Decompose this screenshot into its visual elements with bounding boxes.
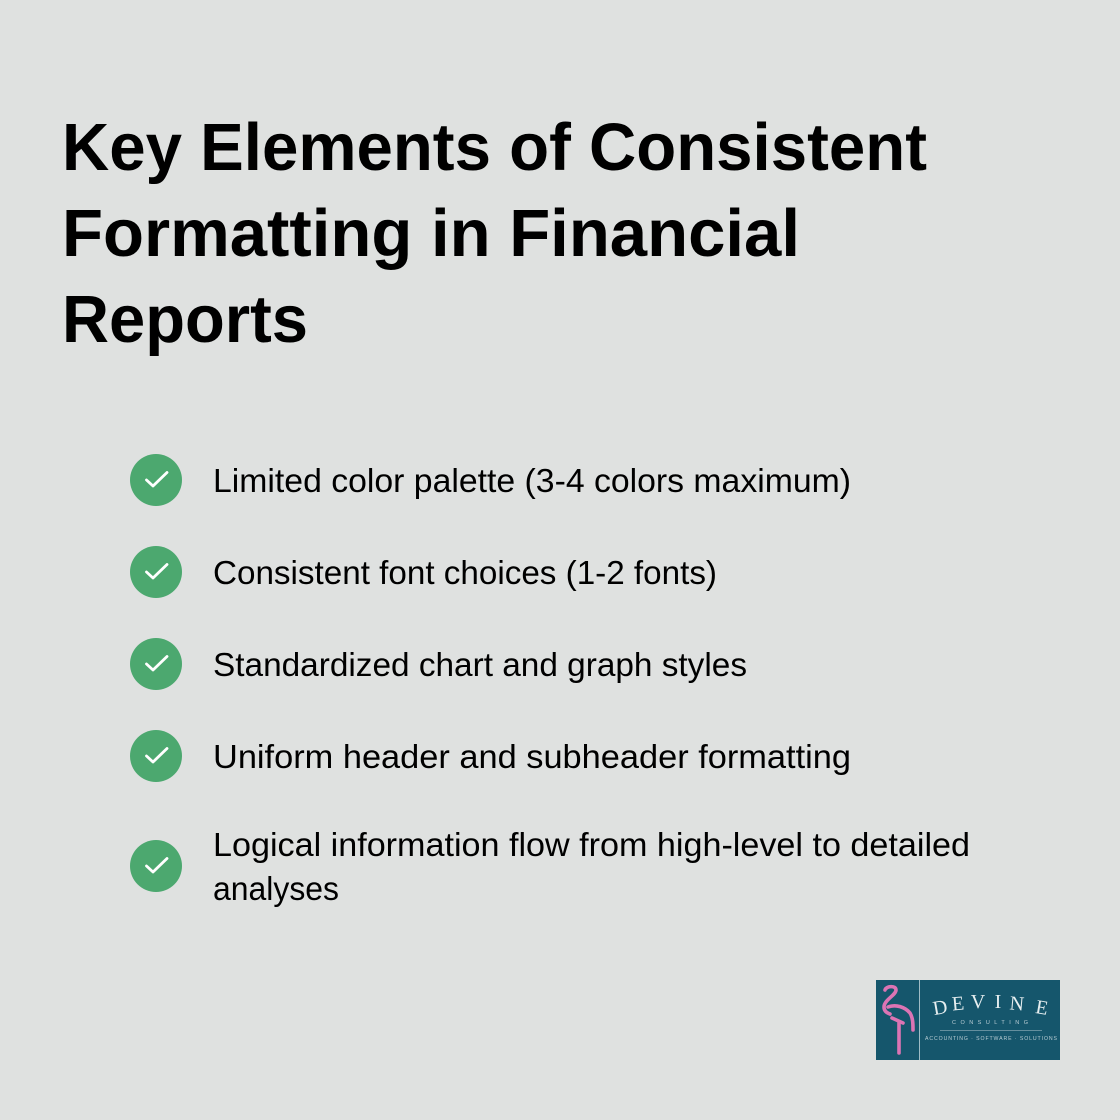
item: limited color palette: Limited color palette (3-4 colors maximum) bbox=[213, 463, 851, 500]
item: logical information flow bbox=[130, 827, 970, 908]
item: logical information flow: Logical information flow from high-level to detailed bbox=[213, 827, 970, 864]
item: limited color palette bbox=[130, 454, 851, 506]
title bbox=[62, 111, 927, 357]
icon: flamingo bbox=[884, 987, 913, 1053]
item: standardized charts: Standardized chart and graph styles bbox=[213, 647, 747, 684]
item: uniform headers bbox=[130, 730, 851, 782]
title: Formatting in Financial bbox=[62, 197, 800, 271]
item: standardized charts bbox=[130, 638, 747, 690]
item: consistent fonts bbox=[130, 546, 717, 598]
wordmark bbox=[925, 991, 1058, 1042]
checklist bbox=[130, 454, 970, 908]
wordmark: D bbox=[931, 996, 949, 1020]
wordmark: ACCOUNTING · SOFTWARE · SOLUTIONS bbox=[925, 1036, 1058, 1042]
wordmark: E bbox=[951, 993, 965, 1015]
wordmark: E bbox=[1034, 996, 1050, 1020]
item: consistent fonts: Consistent font choices (1-2 fonts) bbox=[213, 555, 717, 592]
item: uniform headers: Uniform header and subheader formatting bbox=[213, 739, 851, 776]
title: Reports bbox=[62, 283, 308, 357]
wordmark: V bbox=[971, 991, 986, 1013]
title: Key Elements of Consistent bbox=[62, 111, 927, 185]
wordmark: N bbox=[1009, 992, 1025, 1016]
logo: Devine Consulting bbox=[876, 980, 1060, 1060]
wordmark: CONSULTING bbox=[952, 1020, 1028, 1026]
wordmark: I bbox=[995, 991, 1001, 1013]
item: logical information flow: analyses bbox=[213, 871, 339, 908]
